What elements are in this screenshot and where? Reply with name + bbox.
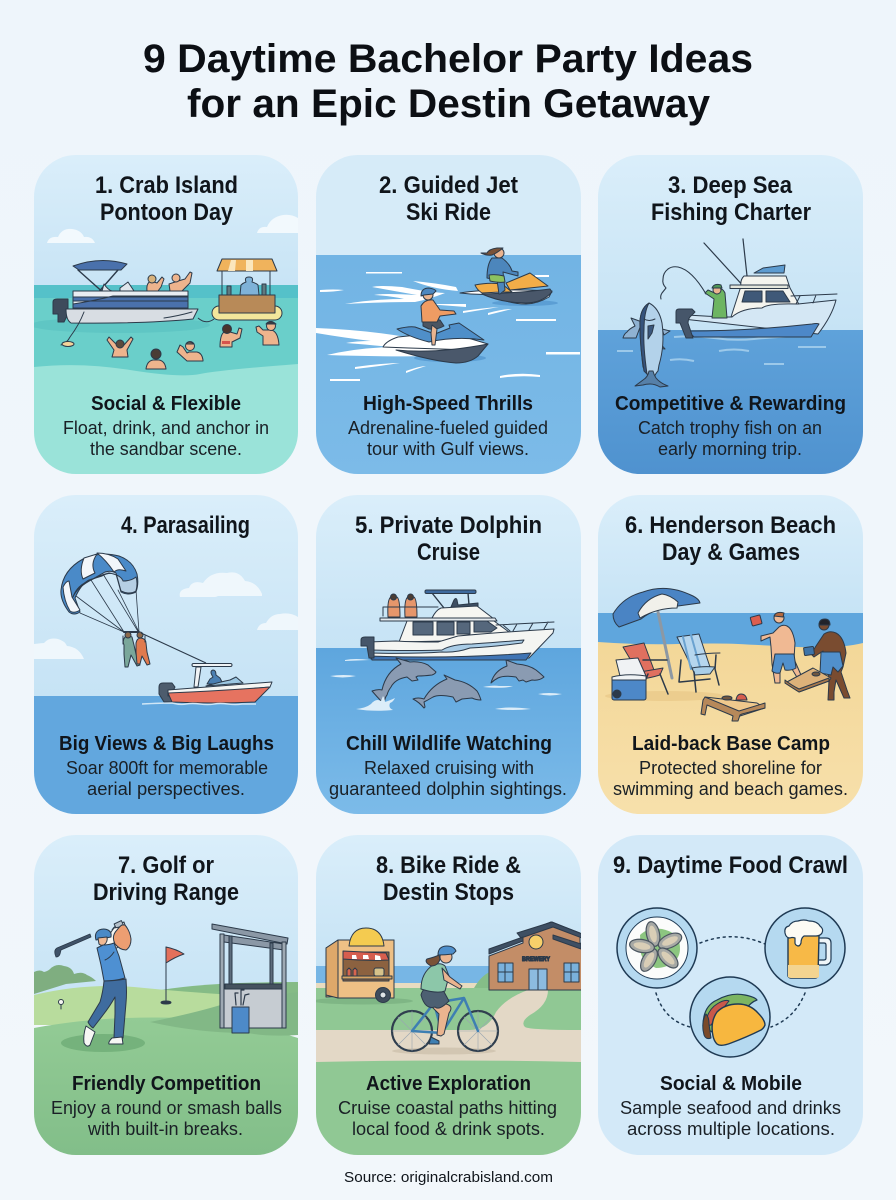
caption: big views: aerial perspectives. <box>87 778 245 799</box>
heading: dolphin cruise: Cruise <box>417 539 480 566</box>
caption: active exploration: local food & drink spots. <box>352 1118 545 1139</box>
wake and water streaks <box>316 272 580 381</box>
heading: deep sea: Fishing Charter <box>651 199 811 226</box>
caption: chill wildlife: guaranteed dolphin sightings. <box>329 778 567 799</box>
heading: food crawl: 9. Daytime Food Crawl <box>613 852 848 879</box>
caption: friendly competition: with built-in breaks. <box>87 1118 243 1139</box>
heading: golf <box>93 852 239 906</box>
panel: 3. Deep Sea Fishing Charter <box>598 155 863 474</box>
title: for an Epic Destin Getaway <box>187 82 711 126</box>
caption: laid back: swimming and beach games. <box>613 778 848 799</box>
panel: 1. Crab Island Pontoon Day <box>30 155 298 474</box>
caption: social and flexible: the sandbar scene. <box>90 438 242 459</box>
icon: tuna fish <box>623 303 670 387</box>
icon: blue jet ski <box>383 288 488 363</box>
heading: deep sea <box>651 172 811 226</box>
heading: bike ride <box>376 852 521 906</box>
icon: cornhole boards <box>701 668 831 721</box>
heading: dolphin cruise <box>356 516 541 560</box>
caption: chill wildlife <box>329 732 567 799</box>
icon: brewery building <box>489 922 583 990</box>
panel: 7. Golf or Driving Range <box>34 835 298 1155</box>
caption: friendly competition <box>51 1072 282 1139</box>
panel: 8. Bike Ride & Destin Stops <box>313 835 583 1155</box>
caption: social and mobile <box>620 1072 841 1139</box>
caption: laid back: Protected shoreline for <box>639 757 822 778</box>
heading: bike ride: Destin Stops <box>383 879 514 906</box>
heading: henderson <box>625 512 836 566</box>
icon: parasailers <box>123 632 150 667</box>
caption: big views: Big Views & Big Laughs <box>59 732 274 755</box>
heading: henderson: 6. Henderson Beach <box>625 512 836 539</box>
icon: beach umbrella <box>613 588 700 678</box>
caption: competitive and rewarding: Catch trophy fish on an <box>638 417 822 438</box>
panel: 6. Henderson Beach Day & Games <box>598 495 863 814</box>
icon: fishing boat <box>661 239 837 338</box>
trees and hills <box>34 965 96 994</box>
icon: oysters plate <box>617 908 697 988</box>
heading: crab island: 1. Crab Island <box>95 172 238 199</box>
icon: dolphins <box>372 658 544 708</box>
icon: clouds <box>34 572 298 659</box>
heading: crab island: Pontoon Day <box>100 199 234 226</box>
icon: golf tee <box>58 1000 64 1009</box>
title: 9 Daytime Bachelor Party Ideas <box>143 37 753 81</box>
caption: chill wildlife: Relaxed cruising with <box>364 757 534 778</box>
tow line <box>141 633 206 663</box>
icon: food truck <box>313 928 413 1004</box>
panel: 4. Parasailing <box>34 495 298 814</box>
caption: big views <box>59 732 274 799</box>
caption: laid back: Laid-back Base Camp <box>632 732 830 755</box>
heading: jet ski <box>380 176 518 220</box>
icon: taco plate <box>690 977 770 1057</box>
caption: active exploration: Cruise coastal paths hitting <box>338 1097 557 1118</box>
caption: high speed thrills <box>348 395 547 455</box>
heading: jet ski: Ski Ride <box>406 199 491 226</box>
icon: parachute <box>61 553 139 633</box>
heading: golf: 7. Golf or <box>118 852 214 879</box>
caption: laid back <box>613 732 848 799</box>
caption: social and flexible <box>64 395 268 455</box>
icon: floating tiki bar <box>212 259 282 320</box>
caption: social and mobile: Sample seafood and drinks <box>620 1097 841 1118</box>
heading: golf: Driving Range <box>93 879 239 906</box>
caption: social and mobile: across multiple locations. <box>627 1118 835 1139</box>
caption: active exploration: Active Exploration <box>366 1072 531 1095</box>
icon: yacht <box>361 590 554 660</box>
icon: orange jet ski <box>460 248 558 306</box>
icon: swimmers <box>107 322 279 369</box>
caption: social and flexible: Social & Flexible <box>91 392 241 415</box>
heading: deep sea: 3. Deep Sea <box>668 172 793 199</box>
caption: chill wildlife: Chill Wildlife Watching <box>346 732 552 755</box>
icon: cyclist <box>392 946 498 1054</box>
icon: speedboat <box>159 664 272 703</box>
caption: competitive and rewarding: early morning trip. <box>658 438 802 459</box>
heading: parasailing: 4. Parasailing <box>121 512 250 539</box>
icon: brewery building: BREWERY <box>522 957 550 963</box>
icon: players <box>750 612 850 700</box>
caption: competitive and rewarding <box>615 392 846 459</box>
caption: social and flexible: Float, drink, and anchor in <box>63 417 269 438</box>
caption: friendly competition: Enjoy a round or smash balls <box>51 1097 282 1118</box>
dashed connectors <box>656 937 805 1027</box>
icon: beach chairs <box>623 634 720 694</box>
caption: big views: Soar 800ft for memorable <box>66 757 268 778</box>
water ripple <box>142 703 256 704</box>
panel: 2. Guided Jet Ski Ride <box>316 155 581 474</box>
caption: friendly competition: Friendly Competition <box>72 1072 261 1095</box>
heading: henderson: Day & Games <box>662 539 800 566</box>
caption: active exploration <box>338 1072 557 1139</box>
heading: crab island <box>95 172 238 226</box>
icon: clouds <box>47 215 298 243</box>
icon: driving range shelter <box>212 924 288 1033</box>
heading: jet ski: 2. Guided Jet <box>379 172 518 199</box>
panel: 9. Daytime Food Crawl <box>598 835 863 1155</box>
icon: cooler <box>612 658 646 700</box>
caption: competitive and rewarding: Competitive & Rewarding <box>615 392 846 415</box>
caption: social and mobile: Social & Mobile <box>660 1072 802 1095</box>
source credit: Source: originalcrabisland.com <box>344 1170 553 1186</box>
panel: 5. Private Dolphin Cruise <box>316 495 581 814</box>
icon: flag <box>161 947 184 1004</box>
icon: pontoon boat <box>53 260 198 346</box>
title <box>143 37 753 126</box>
caption: high speed thrills: Adrenaline-fueled guided <box>348 417 548 438</box>
icon: beer plate <box>765 908 845 988</box>
water ripples <box>617 336 826 364</box>
caption: high speed thrills: tour with Gulf views. <box>367 438 529 459</box>
caption: high speed thrills: High-Speed Thrills <box>363 392 533 415</box>
heading: bike ride: 8. Bike Ride & <box>376 852 521 879</box>
water splash <box>330 659 562 711</box>
icon: golfer <box>55 921 131 1046</box>
heading: dolphin cruise: 5. Private Dolphin <box>355 512 542 539</box>
bike path <box>316 990 581 1062</box>
